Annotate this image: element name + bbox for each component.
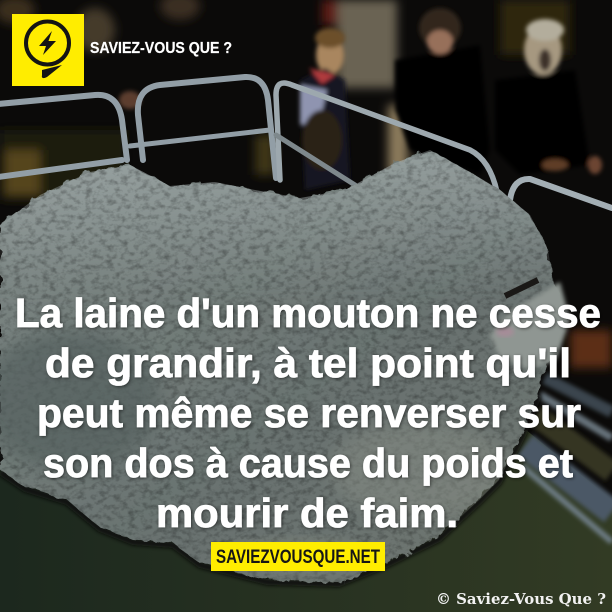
website badge [211, 542, 385, 571]
metal railings [0, 77, 612, 208]
main statement: La laine d'un mouton ne cesse [15, 290, 601, 336]
main statement: son dos à cause du poids et [43, 440, 573, 486]
website badge: SAVIEZVOUSQUE.NET [216, 547, 380, 568]
site name: SAVIEZ-VOUS QUE ? [90, 40, 232, 57]
main statement: de grandir, à tel point qu'il [45, 340, 571, 386]
copyright: © Saviez-Vous Que ? [436, 591, 606, 608]
main statement: mourir de faim. [156, 490, 458, 536]
main statement [15, 290, 601, 536]
main statement: peut même se renverser sur [37, 390, 581, 436]
sheep head and collar [490, 280, 570, 370]
people in the crowd [119, 8, 602, 190]
lower right chute rails [522, 378, 612, 542]
logo: yellow square with bulb and lightning [12, 14, 84, 86]
grass [0, 425, 612, 612]
sheep wool body [0, 150, 575, 590]
